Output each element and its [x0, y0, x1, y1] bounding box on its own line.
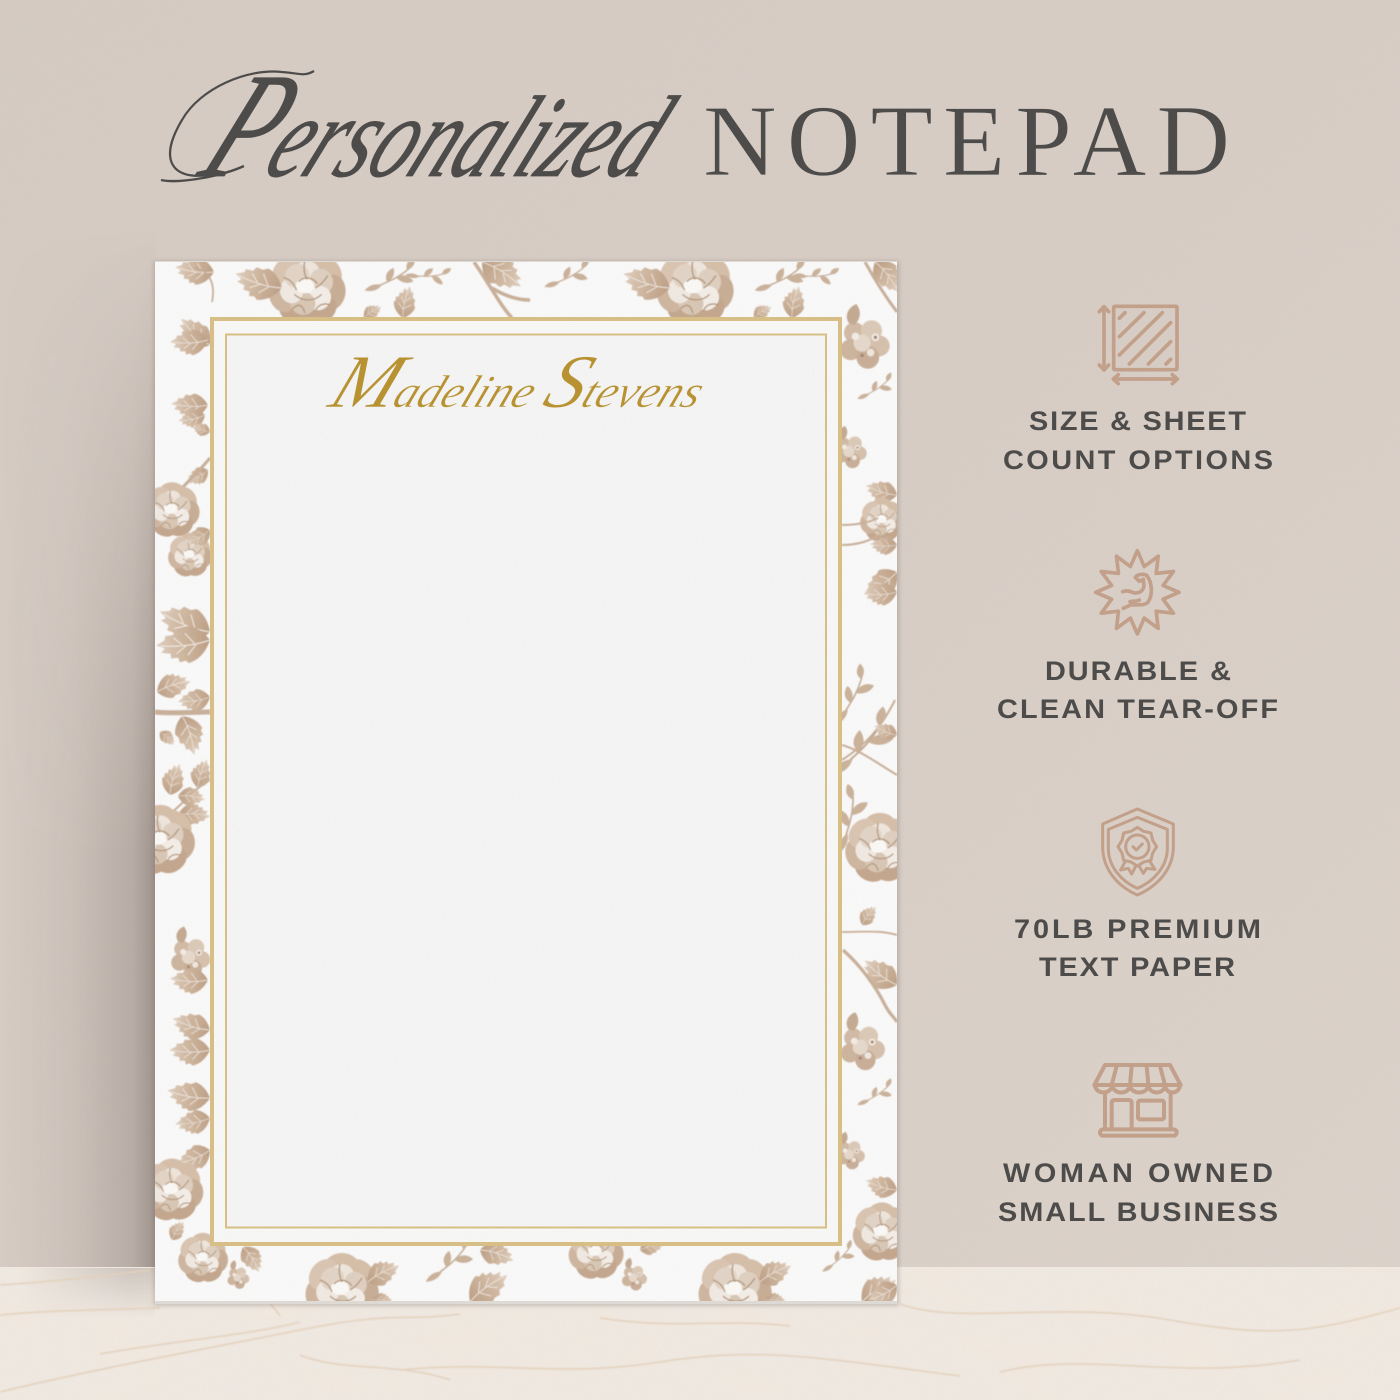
label: woman owned: SMALL BUSINESS: [998, 1197, 1278, 1227]
top band: [269, 262, 346, 317]
left band: [180, 318, 210, 348]
icon: size square with arrows: [1099, 306, 1177, 384]
title serif word: NOTEPAD: [703, 85, 1230, 198]
title script word: Personalized: [178, 44, 707, 209]
bottom band: [305, 1252, 380, 1301]
marble floor: [0, 1267, 1400, 1400]
icon: shield with rosette: [1103, 809, 1173, 895]
label: size and sheet count: SIZE & SHEET: [1029, 406, 1246, 436]
right band: [840, 304, 890, 369]
icon: storefront: [1094, 1065, 1181, 1136]
personalised name: Madeline Stevens: [318, 341, 723, 424]
label: woman owned: WOMAN OWNED: [1003, 1158, 1273, 1188]
label: durable: DURABLE &: [1045, 656, 1231, 686]
outer gold frame: [212, 319, 840, 1244]
title: [161, 44, 1230, 209]
label: premium paper: TEXT PAPER: [1039, 952, 1235, 982]
feature: premium paper: [1014, 809, 1261, 982]
inner gold frame: [226, 334, 826, 1228]
wall background: [40, 292, 155, 1267]
feature: size and sheet count: [1003, 306, 1273, 475]
floral border: [155, 262, 897, 1301]
feature: woman owned: [998, 1065, 1278, 1227]
label: size and sheet count: COUNT OPTIONS: [1003, 445, 1273, 475]
label: durable: CLEAN TEAR-OFF: [997, 694, 1278, 724]
icon: flexed arm in starburst: [1096, 551, 1179, 634]
label: premium paper: 70LB PREMIUM: [1014, 914, 1261, 944]
notepad: [122, 247, 917, 1331]
feature: durable: [997, 551, 1278, 724]
